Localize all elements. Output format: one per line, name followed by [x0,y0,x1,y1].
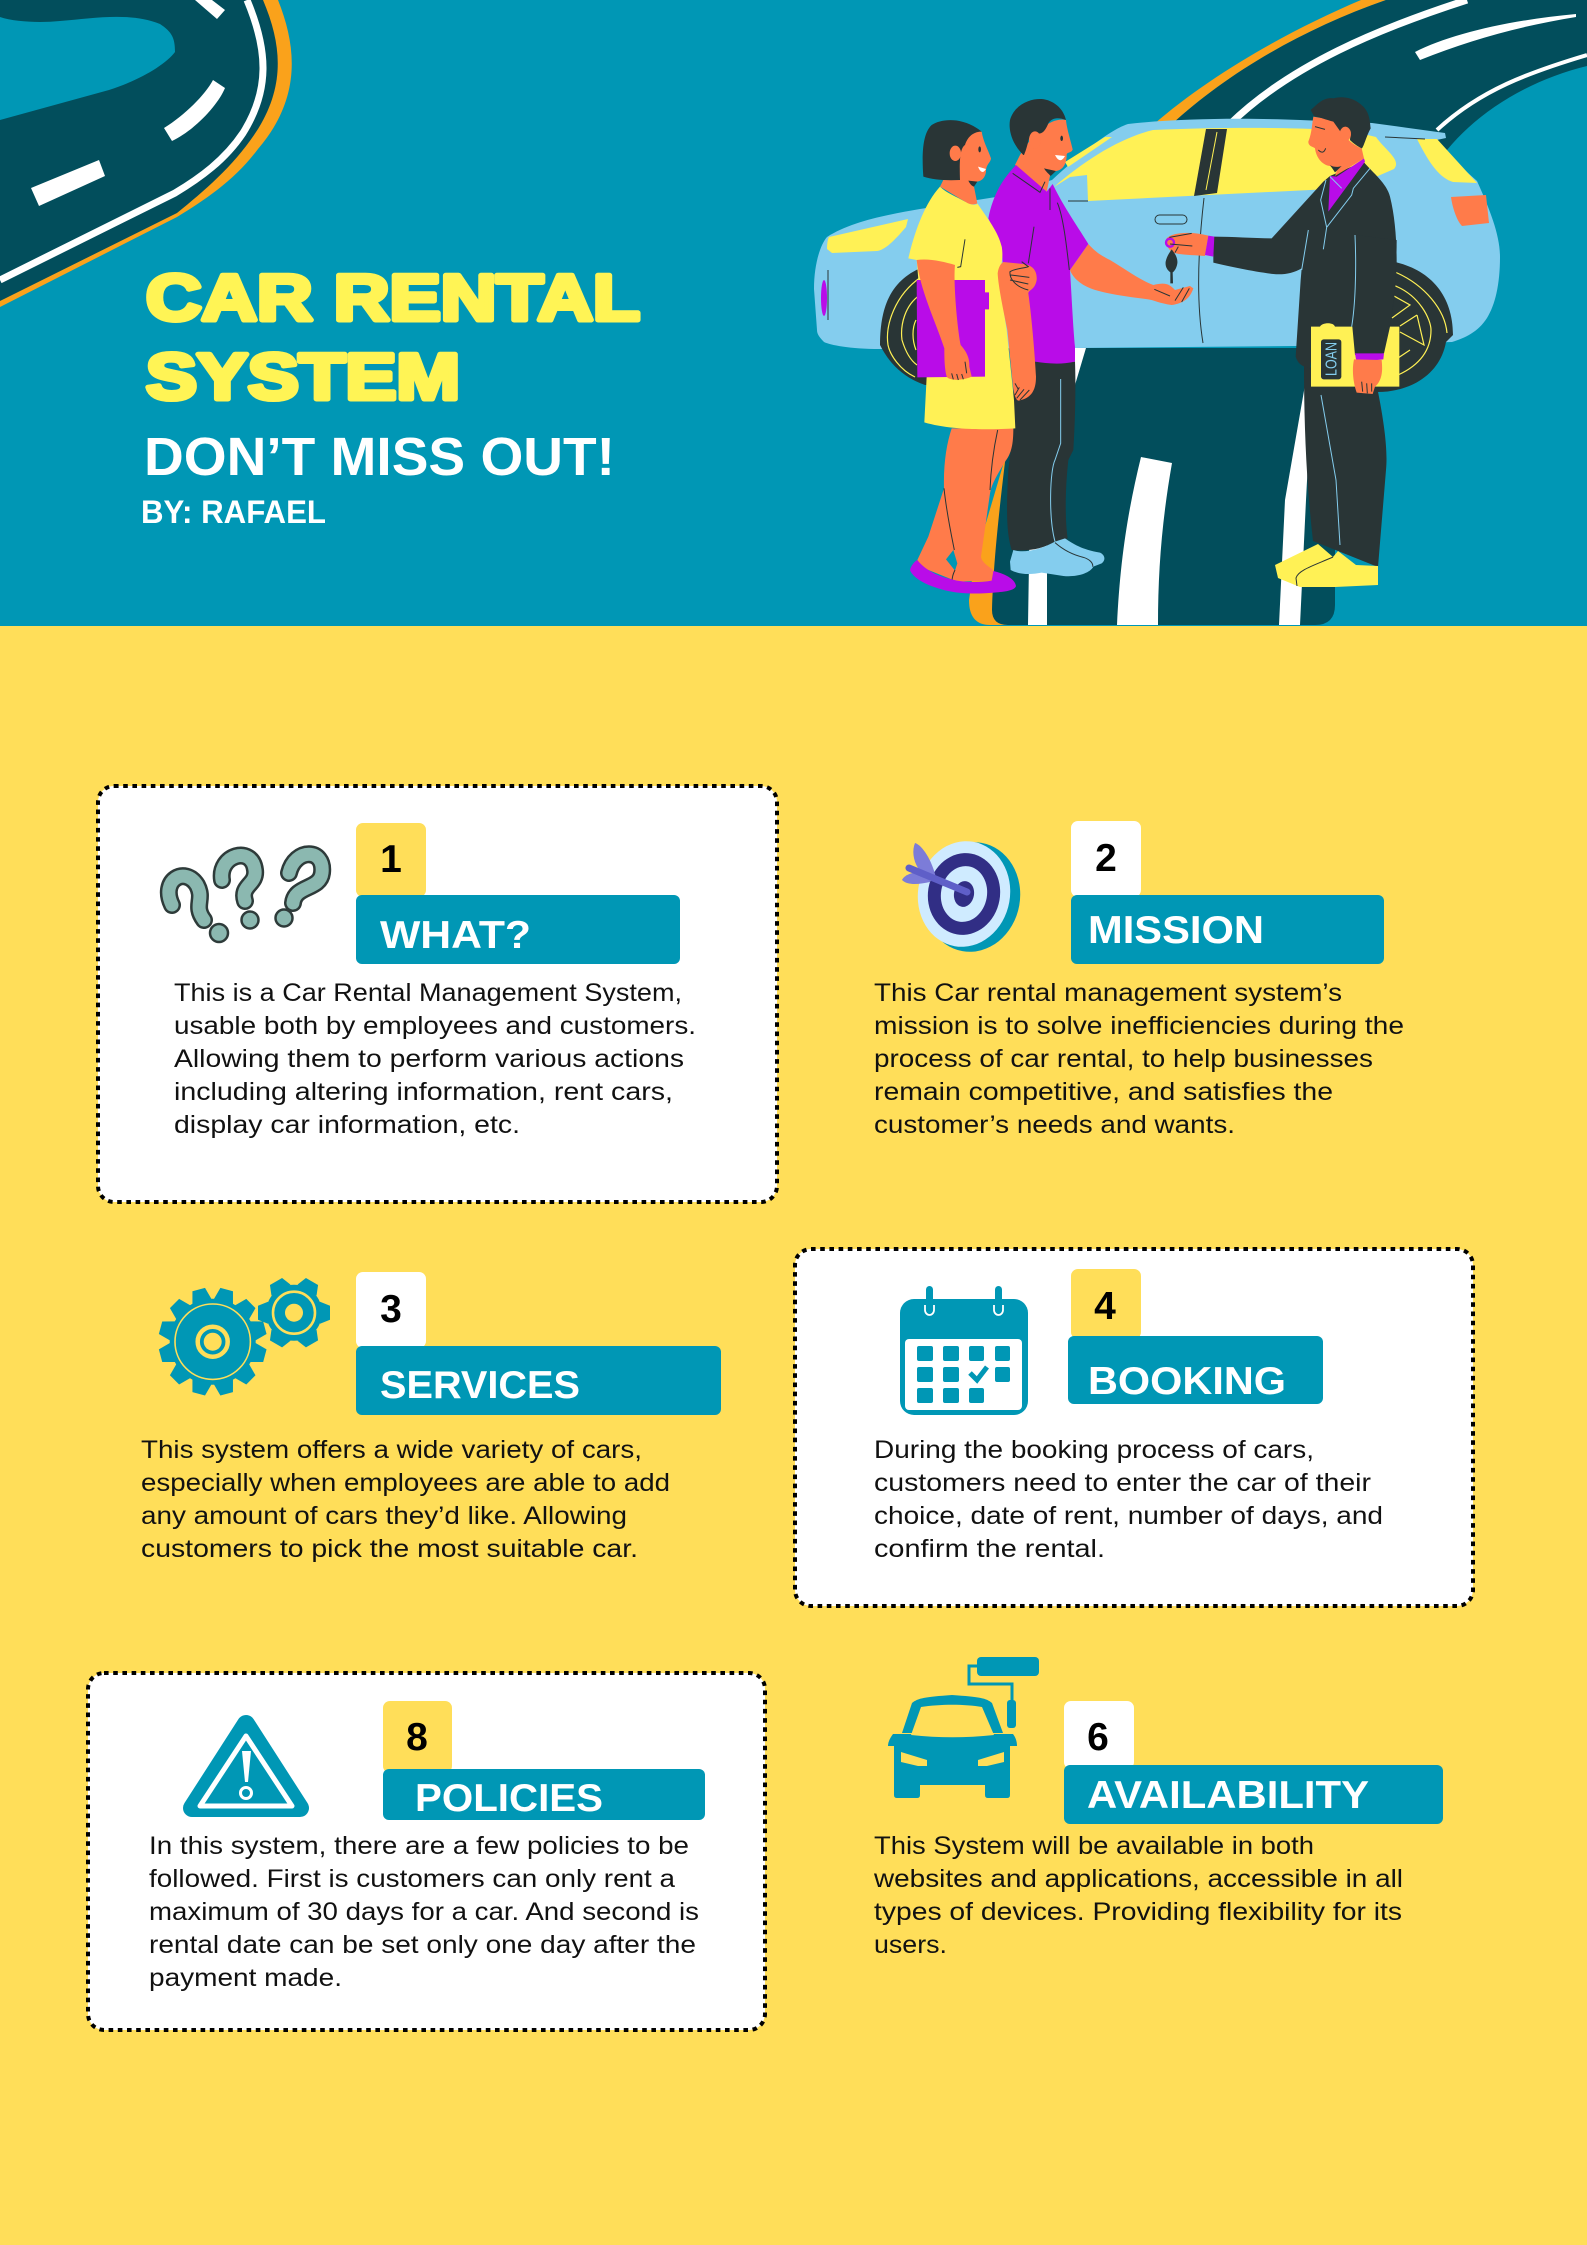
man arm [1070,244,1193,305]
heading bar [1071,895,1384,964]
icon: gears [158,1276,330,1396]
dotted card [795,1249,1473,1606]
icon: warning triangle [192,1724,300,1808]
body text: customer’s needs and wants. [874,1111,1235,1139]
panel: booking [795,1249,1473,1606]
number badge [1071,1269,1141,1339]
body text: rental date can be set only one day after the [149,1931,696,1959]
number badge [1064,1701,1134,1769]
number badge [1071,821,1141,897]
salesman sleeve [1352,235,1397,355]
body text: usable both by employees and customers. [174,1012,696,1040]
woman legs [917,428,1013,582]
icon: question marks [169,854,322,942]
title: SYSTEM [146,340,460,413]
body text [874,979,1404,1139]
body text: maximum of 30 days for a car. And second is [149,1898,699,1926]
man shoes [1010,538,1104,576]
salesman trousers [1304,366,1387,567]
car key [1166,239,1177,283]
heading: POLICIES [415,1777,603,1820]
foreground road [969,348,1335,625]
body text: types of devices. Providing flexibility for its [874,1898,1402,1926]
body text: This System will be available in both [874,1832,1314,1860]
number: 4 [1094,1285,1116,1328]
body text: During the booking process of cars, [874,1436,1314,1464]
salesman jacket [1213,162,1397,368]
subtitle: DON’T MISS OUT! [144,427,615,487]
panel: mission [874,821,1404,1139]
illustration: rental car [814,119,1500,392]
number: 8 [406,1716,428,1759]
salesman cuff [1355,353,1384,360]
title: CAR RENTAL [146,261,640,334]
panel: services [141,1272,721,1563]
woman far arm [998,262,1037,401]
body text: users. [874,1931,947,1959]
illustration: man in purple shirt [988,99,1193,576]
number: 6 [1087,1716,1109,1759]
woman hair [923,120,982,180]
woman near arm [917,260,972,380]
body text: display car information, etc. [174,1111,520,1139]
salesman shirt [1328,158,1365,212]
body text: This system offers a wide variety of cars, [141,1436,642,1464]
number: 3 [380,1288,402,1331]
heading: MISSION [1088,909,1264,952]
loan clipboard [1311,323,1399,387]
heading bar [1068,1336,1323,1404]
number badge [383,1701,452,1773]
woman face and neck [940,132,991,204]
dotted card [98,786,777,1202]
heading bar [1064,1765,1443,1824]
salesman reaching hand [1166,233,1208,256]
woman dress [908,187,1015,429]
top-right curved road [1153,0,1587,150]
heading: WHAT? [380,914,531,957]
number badge [356,1272,426,1348]
illustration: woman [908,120,1037,594]
salesman hair [1311,97,1371,148]
heading bar [356,1346,721,1415]
body text: In this system, there are a few policies to be [149,1832,689,1860]
body text: remain competitive, and satisfies the [874,1078,1333,1106]
salesman hand [1353,359,1382,394]
heading bar [383,1769,705,1820]
left wheel [880,266,985,385]
body text: process of car rental, to help businesses [874,1045,1373,1073]
illustration: salesman in suit [1166,97,1399,587]
body text: including altering information, rent cars, [174,1078,673,1106]
byline: BY: RAFAEL [141,494,326,530]
header band [0,0,1587,626]
body text: followed. First is customers can only rent a [149,1865,675,1893]
icon: car with paint roller [888,1657,1039,1798]
body text: This Car rental management system’s [874,979,1342,1007]
body text [141,1436,670,1563]
body text [174,979,696,1139]
body text [149,1832,699,1992]
heading: SERVICES [380,1364,580,1407]
purple folder [917,280,989,377]
title [146,261,640,413]
body text: any amount of cars they’d like. Allowing [141,1502,627,1530]
body text: This is a Car Rental Management System, [174,979,682,1007]
body text: especially when employees are able to add [141,1469,670,1497]
icon: calendar [900,1286,1028,1415]
salesman shoes [1275,544,1378,587]
heading: AVAILABILITY [1087,1774,1369,1817]
body text: payment made. [149,1964,342,1992]
man trousers [1007,362,1075,550]
woman shoes [910,560,1016,594]
right wheel [1360,262,1453,392]
loan clipboard: LOAN [1324,342,1341,376]
panel: availability [873,1657,1443,1959]
man face and neck [1015,120,1073,192]
panel: policies [88,1673,765,2030]
icon: target with dart [902,834,1029,959]
number: 2 [1095,837,1117,880]
body text: Allowing them to perform various actions [174,1045,684,1073]
heading: BOOKING [1088,1360,1286,1403]
number badge [356,823,426,897]
body text [873,1832,1403,1959]
body text: websites and applications, accessible in all [873,1865,1403,1893]
body text: mission is to solve inefficiencies during the [874,1012,1404,1040]
number: 1 [380,838,402,881]
salesman face [1308,117,1364,176]
body text: confirm the rental. [874,1535,1105,1563]
body text: customers need to enter the car of their [874,1469,1371,1497]
body text: choice, date of rent, number of days, and [874,1502,1383,1530]
body text [874,1436,1383,1563]
body text: customers to pick the most suitable car. [141,1535,638,1563]
heading bar [356,895,680,964]
man shirt [988,165,1088,364]
man hair [1010,99,1066,155]
dotted card [88,1673,765,2030]
panel: what [98,786,777,1202]
top-left curved road [0,0,292,307]
